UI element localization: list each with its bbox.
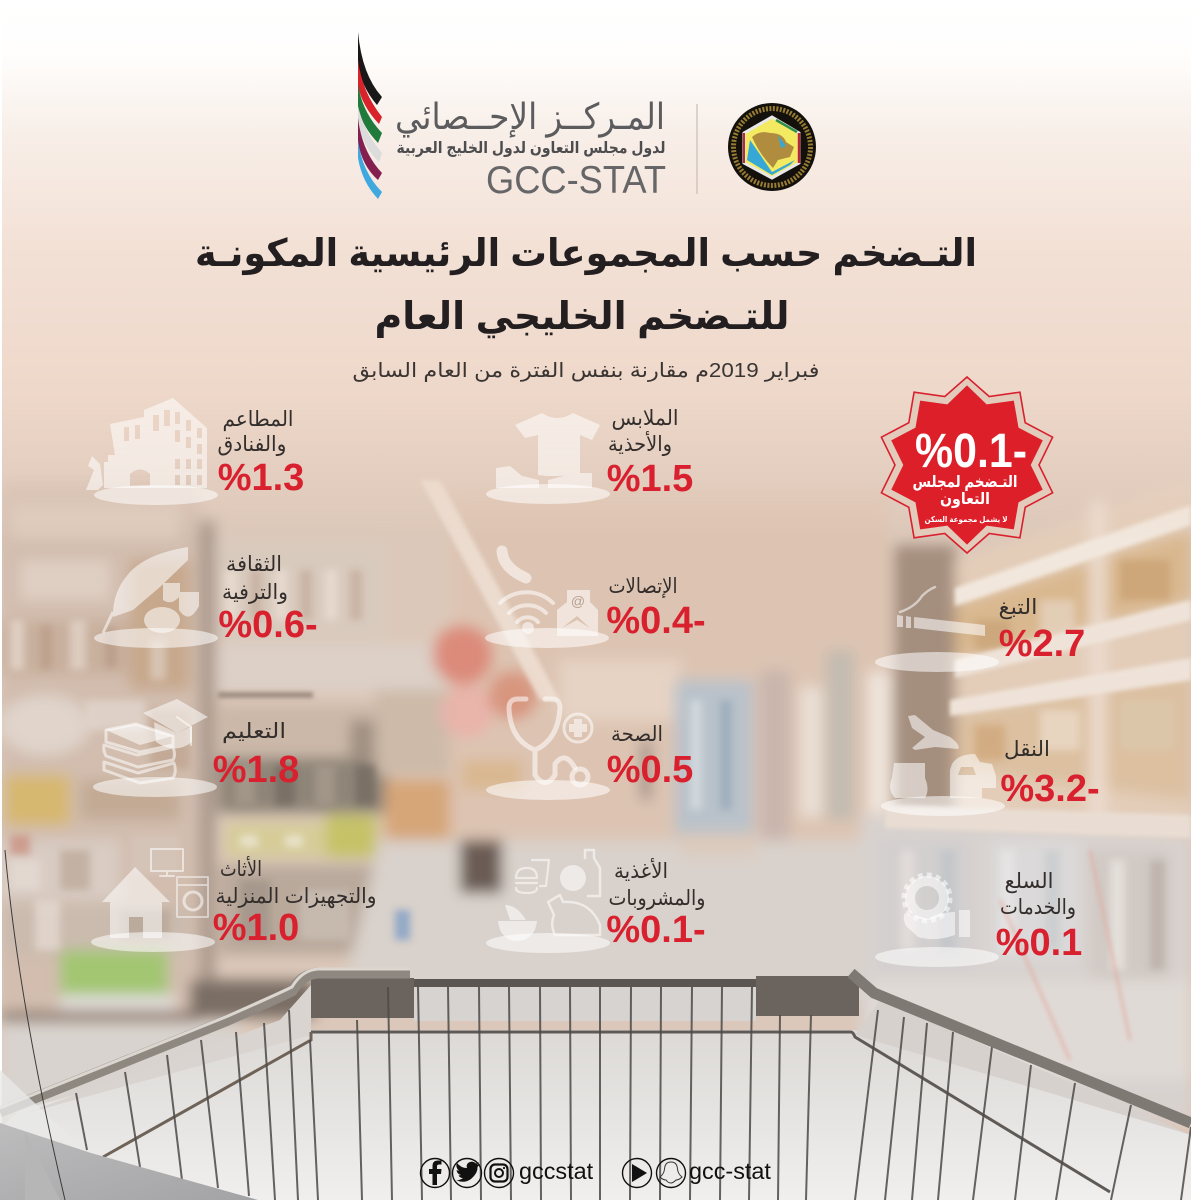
shadow disc: [881, 796, 1005, 816]
panel: clothing and footwear: [486, 407, 693, 504]
icon: feather, masks and palette: [103, 547, 199, 633]
value: %0.4-: [606, 600, 706, 642]
blurred product texture: [10, 560, 1175, 970]
icon: gear in hand: [904, 875, 970, 939]
handle: gcc-stat: gcc-stat: [689, 1158, 771, 1184]
value: %1.5: [607, 458, 693, 500]
shopping cart: [0, 969, 1191, 1200]
shadow disc: [94, 485, 218, 505]
value: %0.5: [607, 749, 693, 791]
label: الأغذية: [614, 858, 668, 883]
label line 2: والترفية: [222, 581, 288, 604]
label: الأثاث: [220, 856, 262, 881]
logo: GCC-STAT: [358, 32, 666, 202]
logo latin name: GCC-STAT: [486, 159, 666, 202]
panel: health: [486, 699, 693, 800]
shadow disc: [486, 780, 610, 800]
shadow disc: [875, 652, 999, 672]
GCC emblem: [728, 103, 816, 191]
label: التبغ: [998, 596, 1038, 619]
panel: culture and recreation: [94, 547, 318, 648]
icon: play: [622, 1158, 652, 1188]
label: النقل: [1004, 738, 1050, 761]
shadow disc: [93, 777, 217, 797]
label: الإتصالات: [608, 575, 678, 598]
icon: phone, wifi and mail: [500, 551, 598, 636]
label: الملابس: [612, 407, 678, 430]
subtitle: فبراير 2019م مقارنة بنفس الفترة من العام السابق: [353, 360, 820, 382]
logo arabic name: المـركــز الإحــصائي: [395, 96, 665, 138]
title line 2: للتـضخم الخليجي العام: [374, 296, 790, 339]
icon: cigarette: [897, 587, 985, 636]
panel: food and beverages: [486, 850, 706, 953]
label: التعليم: [222, 720, 286, 744]
label: الثقافة: [226, 553, 282, 576]
icon: plane, boat and cars: [890, 715, 996, 798]
icon: hotel: [86, 398, 207, 490]
value: %2.7: [999, 623, 1085, 665]
label: السلع: [1004, 870, 1054, 893]
title: [195, 233, 977, 339]
badge label line 2: التعاون: [940, 491, 990, 508]
label line 2: والتجهيزات المنزلية: [216, 885, 376, 908]
badge label line 1: التـضخم لمجلس: [912, 474, 1018, 491]
panel: transport: [881, 715, 1100, 816]
icon: food items: [498, 850, 600, 941]
icon: facebook: [420, 1158, 450, 1188]
icon: snapchat: [656, 1158, 686, 1188]
shadow disc: [875, 947, 999, 967]
panel: education: [93, 699, 299, 797]
icon: t-shirt and shoes: [496, 413, 600, 488]
value: %0.1: [996, 922, 1082, 964]
label line 2: والفنادق: [218, 433, 286, 456]
label line 2: والأحذية: [608, 431, 672, 456]
icon: phone, wifi and mail: @: [571, 593, 585, 609]
shadow disc: [486, 933, 610, 953]
icon: house, monitor and washer: [102, 849, 208, 938]
logo ribbon: [358, 32, 382, 199]
value: %3.2-: [1000, 768, 1100, 810]
icon: stethoscope: [509, 699, 592, 785]
footer: social media handles: [420, 1158, 771, 1188]
panel: furniture and household appliances: [91, 849, 376, 952]
logo subtitle: لدول مجلس التعاون لدول الخليج العربية: [396, 140, 666, 157]
callout: GCC inflation badge: [881, 377, 1053, 560]
panel: tobacco: [875, 587, 1085, 672]
value: %1.8: [213, 749, 299, 791]
shadow disc: [485, 628, 609, 648]
icon: twitter: [452, 1158, 482, 1188]
label: الصحة: [611, 723, 663, 746]
icon: books and graduation cap: [104, 699, 208, 783]
shadow disc: [94, 628, 218, 648]
value: %1.0: [213, 907, 299, 949]
handle: gccstat: gccstat: [519, 1158, 594, 1184]
badge note: لا يشمل مجموعة السكن: [924, 515, 1008, 524]
shadow disc: [91, 932, 215, 952]
icon: instagram: [484, 1158, 514, 1188]
value: %0.6-: [218, 604, 318, 646]
bottom-left grey decorative shape: [0, 850, 258, 1200]
panel: goods and services: [875, 870, 1082, 967]
label line 2: والمشروبات: [608, 887, 706, 910]
panel: restaurants and hotels: [86, 398, 304, 505]
value: %1.3: [218, 457, 304, 499]
value: %0.1-: [606, 909, 706, 951]
label: المطاعم: [222, 408, 294, 432]
badge value: %0.1-: [915, 425, 1027, 478]
shadow disc: [486, 484, 610, 504]
title line 1: التـضخم حسب المجموعات الرئيسية المكونـة: [195, 233, 977, 276]
panel: communications: [485, 551, 706, 648]
label line 2: والخدمات: [1000, 896, 1076, 919]
